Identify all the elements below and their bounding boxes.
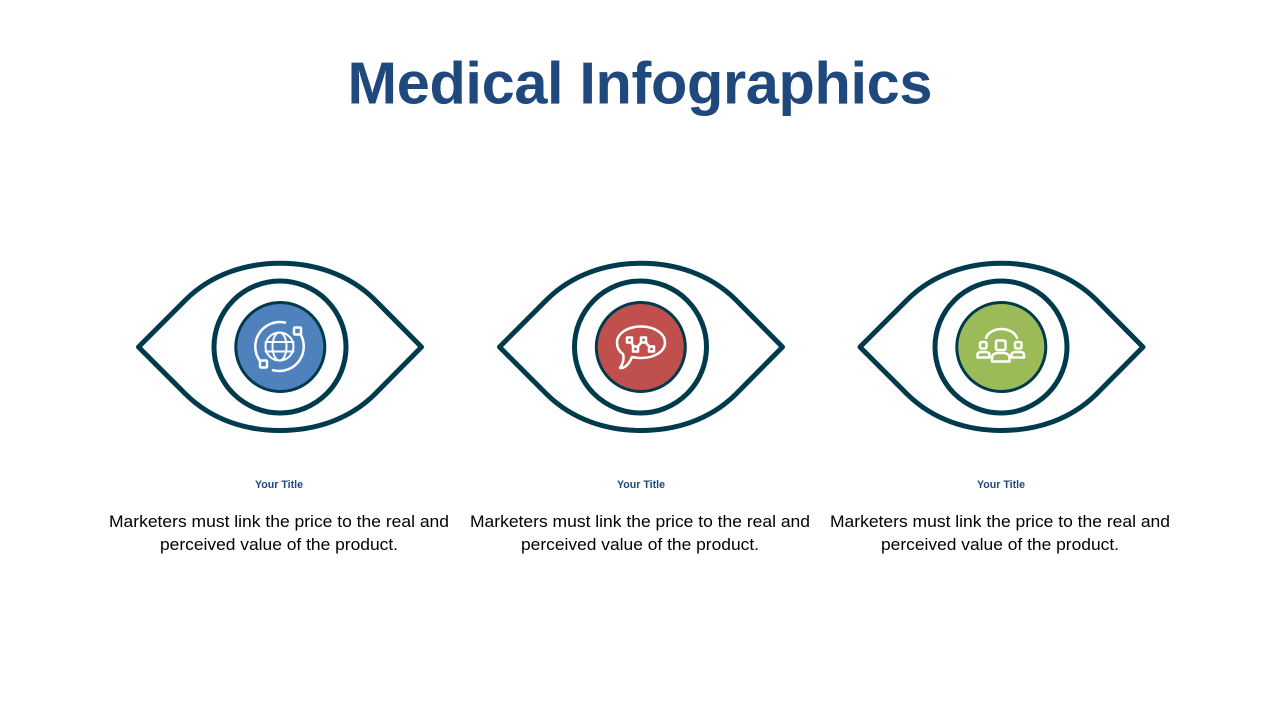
text block 3: perceived value of the product. xyxy=(881,535,1119,554)
text block 1: Marketers must link the price to the real and xyxy=(109,512,449,531)
text block 3: Marketers must link the price to the real and xyxy=(830,512,1170,531)
text block 1: perceived value of the product. xyxy=(160,535,398,554)
panel: eye 3 xyxy=(830,263,1170,554)
icon: globe xyxy=(255,322,304,371)
eye outline 2 xyxy=(500,263,782,430)
icon: group of people xyxy=(978,329,1024,362)
iris ring 3 xyxy=(935,281,1067,413)
title: Medical Infographics xyxy=(348,50,932,116)
icon: speech bubble with chart xyxy=(617,326,665,368)
eye outline 1 xyxy=(138,263,422,430)
eye outline 3 xyxy=(860,263,1143,430)
text block 2: Marketers must link the price to the real and xyxy=(470,512,810,531)
pupil 1 xyxy=(236,302,325,392)
pupil 2 xyxy=(596,302,685,392)
text block 1 xyxy=(109,512,449,554)
iris ring 2 xyxy=(574,281,706,413)
text block 3 xyxy=(830,512,1170,554)
panel: eye 2 xyxy=(470,263,810,554)
text block 2: perceived value of the product. xyxy=(521,535,759,554)
text block 2 xyxy=(470,512,810,554)
iris ring 1 xyxy=(214,281,346,413)
heading 2: Your Title xyxy=(617,479,665,491)
heading 3: Your Title xyxy=(977,479,1025,491)
panel: eye 1 xyxy=(109,263,449,554)
heading 1: Your Title xyxy=(255,479,303,491)
pupil 3 xyxy=(957,302,1046,392)
